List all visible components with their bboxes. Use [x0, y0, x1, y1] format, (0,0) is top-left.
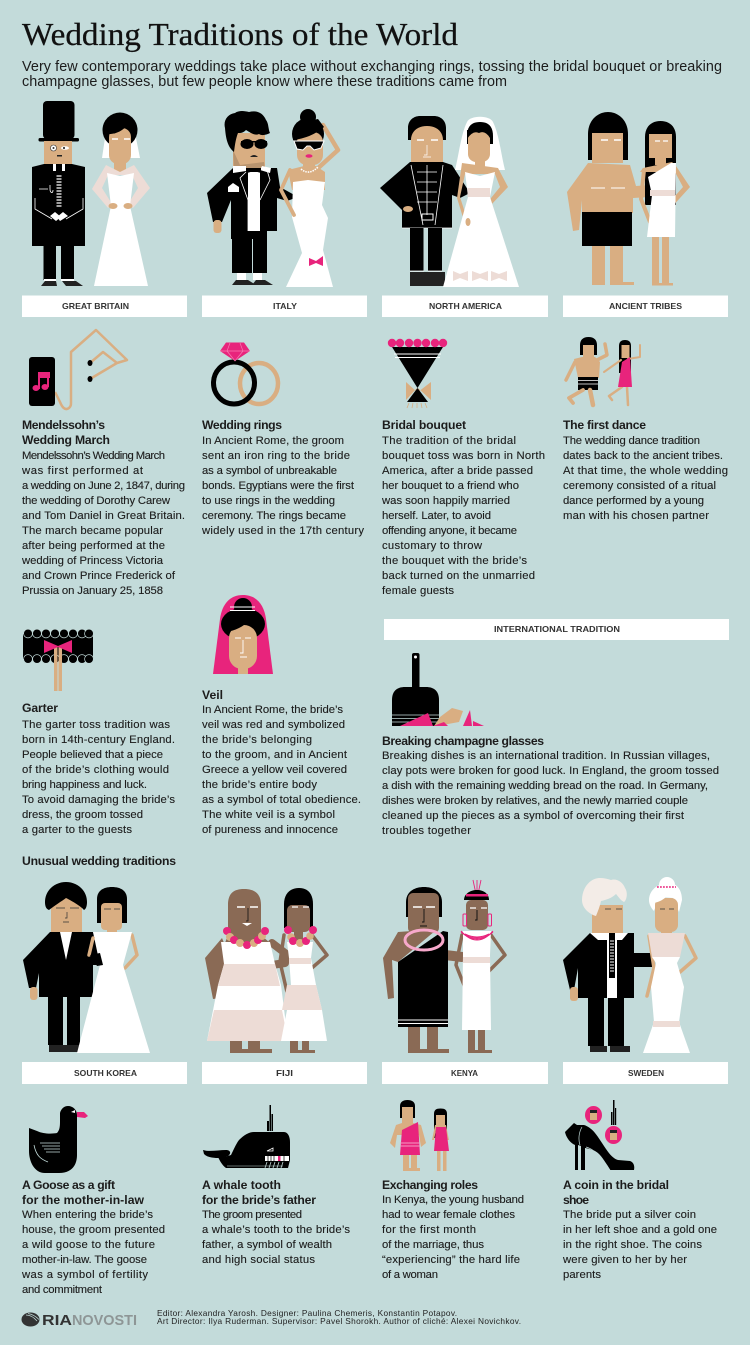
icon: couple exchanging clothes	[390, 1100, 449, 1171]
heading and text: Garter: dress, the groom tossed	[22, 809, 143, 821]
heading and text: Veil: the bride’s entire body	[202, 779, 317, 791]
credits	[157, 1308, 521, 1326]
heading and text: Wedding rings: to use rings in the wedding	[202, 495, 335, 507]
heading and text: Exchanging roles: of a woman	[382, 1269, 438, 1281]
heading and text: Bridal bouquet: offending anyone, it became	[382, 525, 517, 537]
heading and text: Breaking champagne glasses: cleaned up the pieces as a symbol of overcoming their first	[382, 810, 685, 822]
heading and text: Bridal bouquet	[381, 418, 545, 597]
heading and text: Wedding rings: as a symbol of unbreakable	[202, 465, 337, 477]
heading and text: The first dance: ceremony consisted of a ritual	[563, 480, 716, 492]
heading and text: goose gift: mother-in-law. The goose	[22, 1254, 147, 1266]
credits: Editor: Alexandra Yarosh. Designer: Paulina Chemeris, Konstantin Potapov.	[157, 1308, 457, 1318]
label: Sweden: SWEDEN	[628, 1068, 664, 1078]
heading and text: Exchanging roles: for the first month	[382, 1224, 476, 1236]
title: Wedding Traditions of the World	[22, 16, 458, 52]
heading and text: The first dance: dates back to the ancient tribes.	[563, 450, 723, 462]
figure: North America couple	[380, 116, 519, 287]
heading and text: Garter: a garter to the guests	[22, 824, 132, 836]
heading and text: Veil	[202, 688, 361, 836]
heading and text: Mendelssohn's Wedding March: was first performed at	[21, 465, 144, 477]
heading and text: Bridal bouquet: the bouquet with the bride’s	[382, 555, 527, 567]
heading and text: Veil: to the groom, and in Ancient	[202, 749, 348, 761]
heading and text: Exchanging roles: of the marriage, thus	[382, 1239, 484, 1251]
heading and text: Bridal bouquet: was soon happily married	[381, 495, 510, 507]
heading and text: goose gift: for the mother-in-law	[22, 1193, 145, 1207]
heading and text: Garter: Garter	[22, 701, 58, 715]
heading and text: Mendelssohn's Wedding March: Mendelssohn’s	[22, 418, 105, 432]
heading and text: Bridal bouquet: her bouquet to a friend who	[382, 480, 519, 492]
heading and text: Mendelssohn's Wedding March: Wedding March	[22, 433, 110, 447]
heading and text: Mendelssohn's Wedding March: wedding of Princess Victoria	[21, 555, 164, 567]
heading and text: Wedding rings: ceremony. The rings became	[202, 510, 346, 522]
figure: Great Britain couple	[32, 101, 150, 286]
heading and text: Mendelssohn's Wedding March: the wedding of Dorothy Carew	[22, 495, 171, 507]
icon: bridal shoes with coins	[565, 1100, 634, 1170]
label: Fiji	[202, 1062, 367, 1084]
heading and text: whale tooth: and high social status	[202, 1254, 315, 1266]
heading and text: Bridal bouquet: back turned on the unmarried	[382, 570, 535, 582]
heading and text: whale tooth: father, a symbol of wealth	[202, 1239, 332, 1251]
heading and text: Bridal bouquet: The tradition of the bridal	[382, 435, 516, 447]
heading and text: coin in the shoe: The bride put a silver coin	[563, 1209, 696, 1221]
icon: music player with earphones	[29, 330, 127, 409]
heading and text: Veil: the bride’s belonging	[202, 734, 312, 746]
heading and text: whale tooth	[202, 1178, 350, 1266]
label: Italy	[202, 296, 367, 317]
label: North America: NORTH AMERICA	[429, 301, 502, 311]
heading and text: Wedding rings: In Ancient Rome, the groom	[202, 435, 344, 447]
heading and text: The first dance: The first dance	[563, 418, 646, 432]
icon: goose	[29, 1106, 88, 1173]
heading and text: Wedding rings: Wedding rings	[202, 418, 282, 432]
heading and text: Garter: People believed that a piece	[22, 749, 163, 761]
heading and text: Mendelssohn's Wedding March: and Crown Prince Frederick of	[22, 570, 176, 582]
heading and text: Exchanging roles	[382, 1178, 524, 1281]
label: Ancient Tribes	[563, 296, 728, 317]
heading and text: goose gift	[21, 1178, 165, 1296]
heading and text: Garter	[22, 701, 175, 836]
heading and text: whale tooth: The groom presented	[202, 1209, 302, 1221]
heading and text: Breaking champagne glasses: dishes were broken by relatives, and the newly married couple	[382, 795, 688, 807]
heading and text: Veil: In Ancient Rome, the bride’s	[202, 704, 343, 716]
heading and text: The first dance: dance performed by a young	[563, 495, 704, 507]
heading and text: coin in the shoe: parents	[563, 1269, 601, 1281]
heading and text: coin in the shoe: in her left shoe and a gold one	[563, 1224, 717, 1236]
heading and text: Garter: of the bride’s clothing would	[22, 764, 169, 776]
heading and text: Exchanging roles: had to wear female clothes	[382, 1209, 515, 1221]
heading and text: whale tooth: a whale’s tooth to the bride’s	[202, 1224, 350, 1236]
heading and text: coin in the shoe: were given to her by her	[562, 1254, 687, 1266]
heading and text: Mendelssohn's Wedding March: a wedding on June 2, 1847, during	[22, 480, 185, 492]
icon: whale	[203, 1105, 290, 1168]
heading and text: Exchanging roles: “experiencing” the hard life	[382, 1254, 520, 1266]
heading and text: The first dance: man with his chosen partner	[563, 510, 709, 522]
heading and text: goose gift: was a symbol of fertility	[21, 1269, 148, 1281]
label: Great Britain	[22, 296, 187, 317]
heading and text: Mendelssohn's Wedding March: Mendelssohn’s Wedding March	[22, 450, 165, 462]
heading and text: Mendelssohn's Wedding March: Prussia on January 25, 1858	[22, 585, 163, 597]
heading and text: Veil: veil was red and symbolized	[202, 719, 345, 731]
heading and text: Mendelssohn's Wedding March: and Tom Daniel in Great Britain.	[22, 510, 185, 522]
heading and text: goose gift: a wild goose to the future	[22, 1239, 155, 1251]
heading and text: Garter: To avoid damaging the bride’s	[22, 794, 175, 806]
heading and text: coin in the shoe: A coin in the bridal	[563, 1178, 669, 1192]
heading and text: whale tooth: for the bride’s father	[202, 1193, 316, 1207]
label: Italy: ITALY	[273, 301, 297, 311]
heading and text: Breaking champagne glasses	[382, 734, 719, 837]
icon: dustpan with broken glass	[392, 653, 484, 726]
heading and text: Bridal bouquet: Bridal bouquet	[382, 418, 466, 432]
figure: Fiji couple	[205, 888, 327, 1053]
heading and text: The first dance	[563, 418, 728, 522]
heading and text: Breaking champagne glasses: a dish with the remaining wedding bread on the road. In Germany,	[382, 780, 708, 792]
logo: RIA Novosti	[22, 1312, 137, 1329]
heading and text: Breaking champagne glasses: troubles together	[382, 825, 471, 837]
figure: Sweden couple	[563, 877, 696, 1053]
heading and text: Veil: of pureness and innocence	[202, 824, 338, 836]
heading and text: Exchanging roles: In Kenya, the young husband	[382, 1194, 524, 1206]
heading and text: goose gift: house, the groom presented	[22, 1224, 165, 1236]
heading and text: Veil: as a symbol of total obedience.	[202, 794, 361, 806]
heading and text: goose gift: and commitment	[22, 1284, 103, 1296]
heading and text: coin in the shoe: shoe	[563, 1193, 589, 1207]
heading and text: Bridal bouquet: bouquet toss was born in North	[382, 450, 545, 462]
heading and text: Mendelssohn's Wedding March: after being performed at the	[22, 540, 165, 552]
heading and text: goose gift: A Goose as a gift	[22, 1178, 115, 1192]
heading and text: Bridal bouquet: customary to throw	[382, 540, 483, 552]
heading and text: Breaking champagne glasses: clay pots were broken for good luck. In England, the groom tossed	[382, 765, 719, 777]
label: Sweden	[563, 1062, 728, 1084]
label: Kenya: KENYA	[451, 1068, 478, 1078]
heading and text: Veil: Greece a yellow veil covered	[202, 764, 347, 776]
heading and text: Wedding rings: widely used in the 17th century	[201, 525, 364, 537]
label: North America	[382, 296, 548, 317]
logo: RIA Novosti: RIA	[42, 1312, 72, 1329]
label: South Korea	[22, 1062, 187, 1084]
heading and text: The first dance: The wedding dance tradition	[563, 435, 700, 447]
figure: Italy couple	[207, 109, 338, 287]
label: Ancient Tribes: ANCIENT TRIBES	[609, 301, 682, 311]
label: Kenya	[382, 1062, 548, 1084]
heading and text: Veil: The white veil is a symbol	[202, 809, 335, 821]
heading and text: whale tooth: A whale tooth	[202, 1178, 281, 1192]
subtitle	[22, 59, 722, 90]
figure: South Korea couple	[23, 882, 150, 1053]
heading and text: Garter: The garter toss tradition was	[22, 719, 170, 731]
subtitle: champagne glasses, but few people know where these traditions came from	[22, 74, 507, 90]
logo: RIA Novosti: NOVOSTI	[72, 1312, 137, 1329]
label: South Korea: SOUTH KOREA	[74, 1068, 137, 1078]
figure: Kenya couple	[383, 880, 505, 1053]
heading and text: The first dance: At that time, the whole wedding	[563, 465, 728, 477]
subtitle: Very few contemporary weddings take place without exchanging rings, tossing the bridal bouquet or breaking	[22, 59, 722, 75]
heading and text: Garter: bring happiness and luck.	[22, 779, 147, 791]
heading and text: Wedding rings	[201, 418, 364, 537]
heading and text: Garter: born in 14th-century England.	[22, 734, 175, 746]
heading and text: coin in the shoe: in the right shoe. The coins	[563, 1239, 702, 1251]
icon: garter	[23, 629, 93, 691]
heading and text: Exchanging roles: Exchanging roles	[382, 1178, 478, 1192]
heading and text: Mendelssohn's Wedding March	[21, 418, 185, 597]
heading and text: Breaking champagne glasses: Breaking champagne glasses	[382, 734, 544, 748]
heading and text: Bridal bouquet: female guests	[382, 585, 454, 597]
icon: bridal bouquet	[388, 339, 447, 408]
label: Great Britain: GREAT BRITAIN	[62, 301, 129, 311]
heading and text: Breaking champagne glasses: Breaking dishes is an international tradition. In Russian villages,	[382, 750, 710, 762]
heading and text: Bridal bouquet: America, after a bride passed	[382, 465, 533, 477]
heading and text: Veil: Veil	[202, 688, 223, 702]
heading and text: coin in the shoe	[562, 1178, 717, 1281]
icon: dancing couple	[566, 337, 640, 405]
heading and text: Bridal bouquet: herself. Later, to avoid	[382, 510, 491, 522]
credits: Art Director: Ilya Ruderman. Supervisor: Pavel Shorokh. Author of cliché: Alexei Novichkov.	[157, 1316, 521, 1326]
icon: bride with red veil	[213, 595, 273, 674]
heading and text: Wedding rings: sent an iron ring to the bride	[202, 450, 350, 462]
icon: wedding rings	[214, 342, 278, 404]
heading and text: Wedding rings: bonds. Egyptians were the first	[202, 480, 355, 492]
figure: Ancient Tribes couple	[567, 112, 690, 286]
label: International tradition	[384, 619, 729, 640]
heading and text: goose gift: When entering the bride’s	[22, 1209, 153, 1221]
label: International tradition: INTERNATIONAL TRADITION	[494, 624, 620, 634]
label: Fiji: FIJI	[276, 1068, 293, 1078]
heading and text: Mendelssohn's Wedding March: The march became popular	[22, 525, 163, 537]
heading: Unusual wedding traditions: Unusual wedding traditions	[22, 854, 176, 868]
